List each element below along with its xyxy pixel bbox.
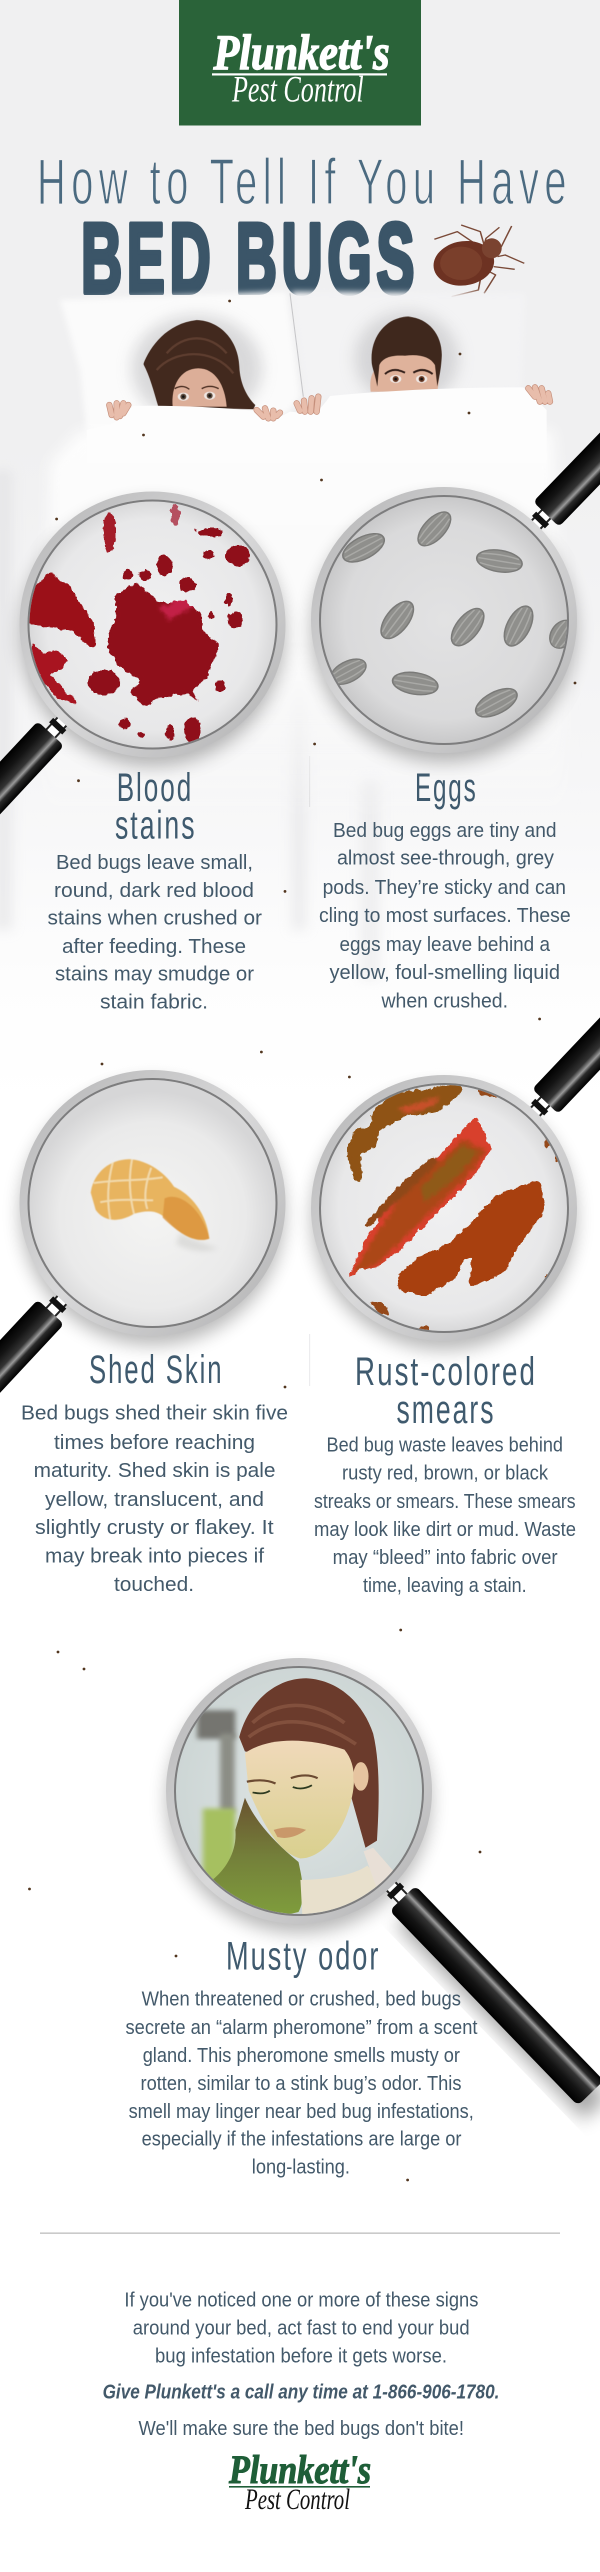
heading: rust-colored smears: smears xyxy=(396,1388,496,1432)
heading: rust-colored smears xyxy=(355,1350,537,1432)
description: rust-colored smears xyxy=(314,1435,576,1597)
description: eggs: cling to most surfaces. These xyxy=(319,905,571,927)
description: shed skin: may break into pieces if xyxy=(45,1546,264,1568)
description: musty odor: rotten, similar to a stink bug’s odor. This xyxy=(140,2073,462,2095)
description: shed skin: times before reaching xyxy=(54,1432,255,1454)
description: shed skin: maturity. Shed skin is pale xyxy=(34,1460,276,1482)
description: eggs: when crushed. xyxy=(381,990,508,1012)
man xyxy=(370,317,442,392)
description: shed skin: slightly crusty or flakey. It xyxy=(35,1517,274,1539)
heading: musty odor: Musty odor xyxy=(226,1934,380,1978)
heading: shed skin: Shed Skin xyxy=(89,1348,224,1392)
woman xyxy=(143,320,255,409)
heading: blood stains: stains xyxy=(115,804,196,848)
panel: musty odor xyxy=(126,1662,600,2179)
description: eggs: Bed bug eggs are tiny and xyxy=(333,820,556,842)
magnifying glass: rust smears xyxy=(312,995,600,1350)
description: blood stains: stains when crushed or xyxy=(48,908,262,930)
call to action text: If you've noticed one or more of these signs xyxy=(124,2290,478,2312)
magnifying glass: musty odor xyxy=(167,1662,600,2120)
magnifying glass: blood stains xyxy=(0,496,284,834)
description: shed skin: Bed bugs shed their skin five xyxy=(21,1403,288,1425)
description: eggs: yellow, foul-smelling liquid xyxy=(330,962,560,984)
magnifying glass: eggs xyxy=(312,408,600,762)
heading: eggs: Eggs xyxy=(415,766,478,810)
logo: Plunkett's Pest Control header: Plunkett's xyxy=(213,24,390,80)
magnifying glass: shed skin xyxy=(0,1074,284,1412)
hands xyxy=(109,387,550,418)
call to action text: We'll make sure the bed bugs don't bite! xyxy=(138,2418,464,2440)
logo: Plunkett's Pest Control footer: Pest Control xyxy=(244,2483,350,2516)
lower bed sheet xyxy=(43,430,567,823)
logo: Plunkett's Pest Control header: Pest Control xyxy=(231,70,364,111)
description: blood stains xyxy=(48,852,262,1014)
description: eggs: almost see-through, grey xyxy=(337,848,554,870)
call to action text: Give Plunkett's a call any time at 1-866-906-1780. xyxy=(103,2381,499,2403)
description: musty odor: especially if the infestations are large or xyxy=(142,2129,462,2151)
right pillow xyxy=(292,292,525,400)
description: musty odor: When threatened or crushed, bed bugs xyxy=(142,1989,461,2011)
icon: bed bug xyxy=(428,225,524,297)
description: eggs xyxy=(319,820,571,1012)
description: blood stains: stains may smudge or xyxy=(55,964,254,986)
left pillow xyxy=(60,292,300,433)
bed bug specks xyxy=(28,300,576,2181)
description: musty odor: smell may linger near bed bug infestations, xyxy=(129,2101,474,2123)
description: shed skin: yellow, translucent, and xyxy=(45,1489,264,1511)
logo: Plunkett's Pest Control header xyxy=(179,0,421,126)
description: shed skin xyxy=(21,1403,288,1596)
call to action text xyxy=(103,2290,499,2440)
description: musty odor: gland. This pheromone smells musty or xyxy=(143,2045,460,2067)
description: rust-colored smears: Bed bug waste leaves behind xyxy=(326,1435,563,1457)
bed sheet folds xyxy=(0,470,380,1386)
description: rust-colored smears: may look like dirt or mud. Waste xyxy=(314,1519,576,1541)
description: blood stains: round, dark red blood xyxy=(54,880,254,902)
panel: shed skin xyxy=(0,1074,288,1596)
heading: blood stains: Blood xyxy=(117,766,193,810)
bed sheet xyxy=(87,387,547,463)
logo: Plunkett's Pest Control footer xyxy=(228,2447,371,2516)
description: musty odor: secrete an “alarm pheromone” from a scent xyxy=(126,2017,478,2039)
description: eggs: pods. They’re sticky and can xyxy=(323,877,566,899)
logo: Plunkett's Pest Control footer: Plunkett's xyxy=(228,2447,371,2492)
panel: rust-colored smears xyxy=(312,995,600,1597)
description: blood stains: after feeding. These xyxy=(62,936,246,958)
description: rust-colored smears: time, leaving a stain. xyxy=(363,1575,527,1597)
description: eggs: eggs may leave behind a xyxy=(340,934,551,956)
panel: blood stains xyxy=(0,496,284,1014)
description: musty odor: long-lasting. xyxy=(252,2157,350,2179)
illustration: couple peeking over bed sheet xyxy=(43,292,567,823)
head shadows on pillows xyxy=(132,312,458,422)
description: blood stains: stain fabric. xyxy=(100,992,208,1014)
call to action text: around your bed, act fast to end your bud xyxy=(133,2318,470,2340)
call to action text: bug infestation before it gets worse. xyxy=(155,2346,447,2368)
heading: blood stains xyxy=(115,766,196,848)
description: rust-colored smears: rusty red, brown, or black xyxy=(342,1463,549,1485)
description: rust-colored smears: may “bleed” into fabric over xyxy=(333,1547,558,1569)
description: shed skin: touched. xyxy=(114,1574,194,1596)
title xyxy=(37,145,572,314)
description: musty odor xyxy=(126,1989,478,2179)
panel: eggs xyxy=(312,408,600,1012)
description: blood stains: Bed bugs leave small, xyxy=(56,852,253,874)
